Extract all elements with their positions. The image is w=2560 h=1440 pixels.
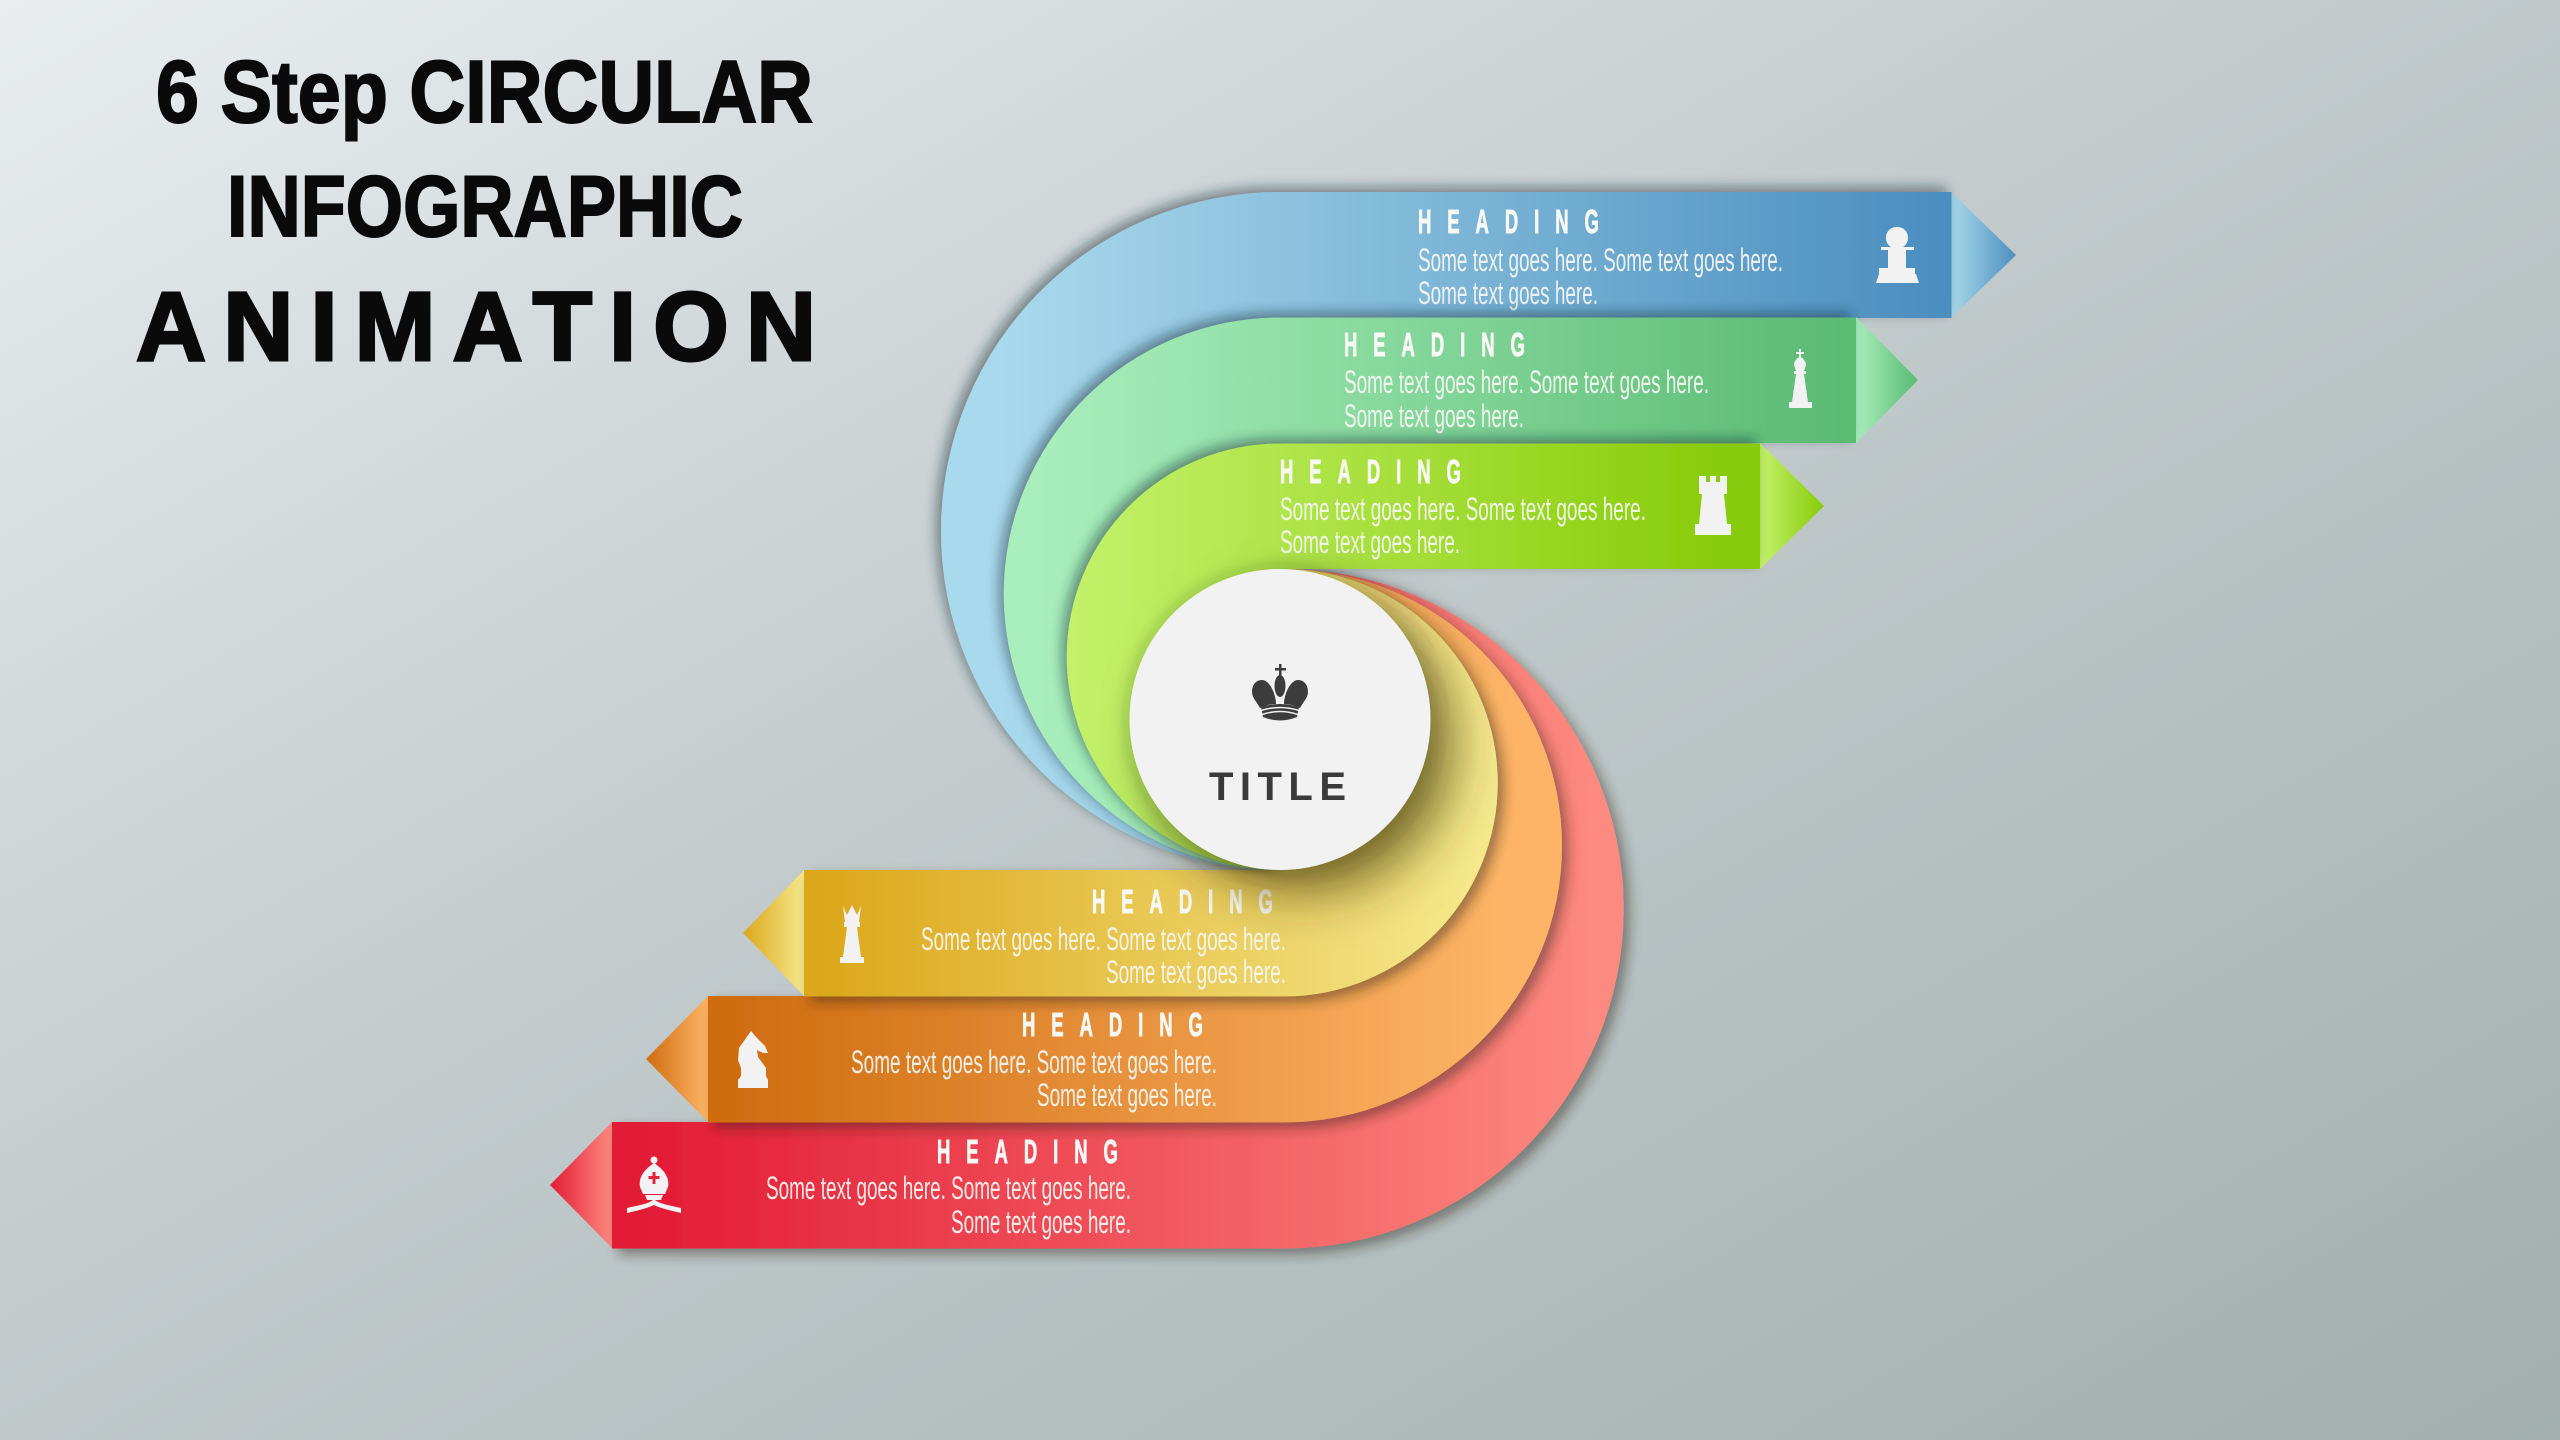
heading: blue: HEADING <box>1418 203 1599 240</box>
title: ANIMATION <box>136 272 816 381</box>
title: 6 Step CIRCULAR <box>156 42 813 141</box>
icon: knight <box>738 1031 768 1088</box>
text: yellow: Some text goes here. Some text goes here. <box>921 921 1286 957</box>
panel: step red <box>550 569 1624 1248</box>
heading: yellow: HEADING <box>1092 883 1273 920</box>
panel: step orange <box>646 569 1562 1122</box>
text: green: Some text goes here. <box>1344 398 1524 434</box>
icon: bishop <box>627 1156 681 1213</box>
text: blue: Some text goes here. <box>1418 275 1598 311</box>
text: lime: Some text goes here. <box>1280 524 1460 560</box>
text: orange: Some text goes here. Some text goes here. <box>851 1044 1217 1080</box>
icon: crown <box>1252 664 1308 720</box>
panel: step yellow <box>743 569 1498 996</box>
text: orange: Some text goes here. <box>1037 1077 1217 1113</box>
icon: king <box>1789 349 1812 408</box>
title: INFOGRAPHIC <box>227 159 743 255</box>
heading: orange: HEADING <box>1022 1006 1203 1043</box>
text: red: Some text goes here. <box>951 1204 1131 1240</box>
text: orange <box>851 1044 1217 1113</box>
text: yellow: Some text goes here. <box>1106 954 1286 990</box>
center title: TITLE <box>1209 765 1346 809</box>
heading: red: HEADING <box>937 1133 1118 1170</box>
panel: step green <box>1004 317 1918 870</box>
panel: step lime <box>1067 443 1824 870</box>
text: green: Some text goes here. Some text goes here. <box>1344 364 1709 400</box>
text: lime <box>1280 491 1646 560</box>
icon: pawn <box>1876 227 1919 283</box>
icon: rook <box>1695 476 1731 535</box>
heading: lime: HEADING <box>1280 453 1461 490</box>
text: red: Some text goes here. Some text goes here. <box>766 1170 1131 1206</box>
panel: center circle <box>1130 569 1430 870</box>
text: yellow <box>921 921 1286 990</box>
text: lime: Some text goes here. Some text goes here. <box>1280 491 1646 527</box>
text: green <box>1344 364 1709 434</box>
heading: green: HEADING <box>1344 326 1525 363</box>
text: blue: Some text goes here. Some text goes here. <box>1418 242 1783 278</box>
title <box>136 42 816 381</box>
text: red <box>766 1170 1131 1240</box>
text: blue <box>1418 242 1783 311</box>
panel: step blue <box>941 192 2016 870</box>
icon: queen <box>840 905 864 963</box>
